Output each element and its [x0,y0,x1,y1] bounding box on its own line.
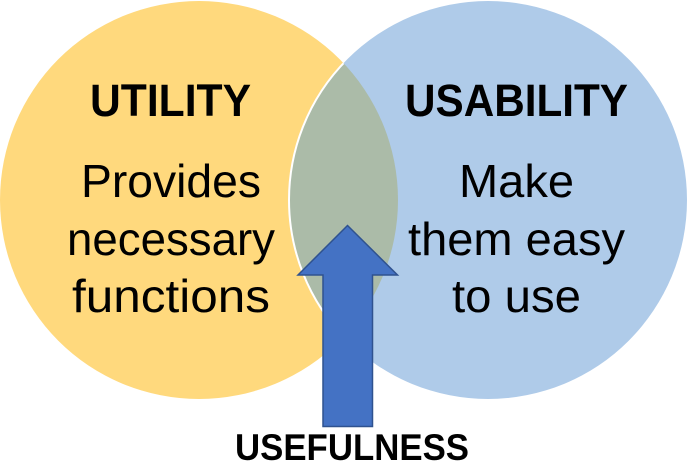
overlap: utility and usability [288,62,398,312]
text block: utility description: necessary [67,213,275,265]
circle: usability [289,1,687,399]
arrow: up to overlap [298,226,398,426]
circle: utility [0,1,398,399]
text block: utility description [67,155,275,322]
text block: usability description: to use [452,270,581,322]
heading: usability: USABILITY [405,75,628,126]
heading: utility: UTILITY [90,75,251,126]
text block: utility description: Provides [81,155,261,207]
text block: usability description [408,155,625,322]
text block: usability description: Make [459,155,574,207]
text block: usability description: them easy [408,213,625,265]
text block: utility description: functions [72,270,270,322]
